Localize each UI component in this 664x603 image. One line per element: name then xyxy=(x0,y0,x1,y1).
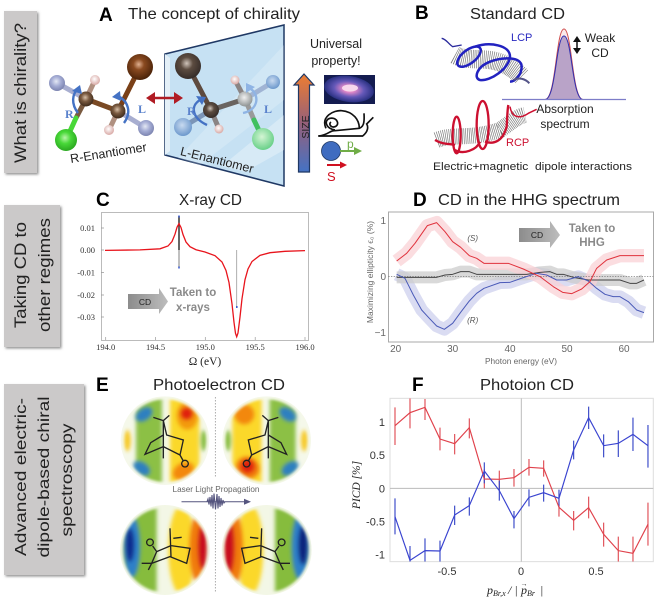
heading D: CD in the HHG spectrum xyxy=(438,192,620,209)
image: top-left VMI map with molecule xyxy=(121,395,209,488)
chart: X-ray CD spectrum: -0.03 xyxy=(77,312,95,322)
heading E: Photoelectron CD xyxy=(153,377,285,394)
heading F: Photoion CD xyxy=(480,377,574,394)
icon: particle with momentum and spin: p xyxy=(347,137,354,151)
heading C: X-ray CD xyxy=(179,192,242,209)
sidebar: taking CD to other regimes xyxy=(4,205,60,347)
chart: X-ray CD spectrum: 0.00 xyxy=(80,245,95,255)
heading D: D xyxy=(413,190,427,211)
heading C: C xyxy=(96,190,110,211)
LCP helix xyxy=(442,38,529,83)
panel D: CD in the HHG spectrum xyxy=(365,190,654,366)
chart: PICD vs momentum: / | xyxy=(507,583,518,597)
chart: PICD vs momentum: -0.5 xyxy=(366,516,385,528)
heading C xyxy=(96,190,242,211)
heading B xyxy=(415,3,565,24)
chart: ellipticity vs photon energy: −1 xyxy=(375,328,386,339)
arrow: CD taken to HHG: HHG xyxy=(579,237,605,249)
icon: particle with momentum and spin xyxy=(322,137,362,184)
chart: PICD vs momentum: → xyxy=(520,580,528,588)
text: universal property: property! xyxy=(311,54,361,68)
chart: ellipticity vs photon energy: 50 xyxy=(561,344,573,355)
sidebar: what is chirality xyxy=(4,11,37,173)
label: absorption spectrum: spectrum xyxy=(540,117,590,131)
icon: particle with momentum and spin: S xyxy=(327,169,336,184)
RCP helix xyxy=(435,101,537,153)
chart: ellipticity vs photon energy: 20 xyxy=(390,344,402,355)
chart: PICD vs momentum: 0 xyxy=(518,566,524,578)
chart: ellipticity vs photon energy: 60 xyxy=(618,344,630,355)
heading A xyxy=(99,5,300,26)
chart: PICD vs momentum: 1 xyxy=(379,417,385,429)
chart: ellipticity vs photon energy: (R) xyxy=(467,316,479,325)
chart: PICD vs momentum: 0 xyxy=(379,484,385,496)
sidebar: advanced spectroscopy xyxy=(4,384,84,575)
heading A: A xyxy=(99,5,113,26)
label: RCP: RCP xyxy=(506,137,529,149)
chart: PICD vs momentum: | xyxy=(540,583,543,597)
chart: PICD vs momentum: Br xyxy=(527,589,536,598)
chart: PICD vs momentum: 0.5 xyxy=(588,566,604,578)
heading E: E xyxy=(96,375,109,396)
panel F: photoion CD xyxy=(351,375,653,598)
heading E xyxy=(96,375,285,396)
chart: X-ray CD spectrum xyxy=(77,212,315,368)
label and arrow: laser light propagation: Laser Light Propagation xyxy=(173,485,260,494)
chart: PICD vs momentum: p xyxy=(486,583,493,597)
size arrow: SIZE xyxy=(300,115,312,139)
chart: X-ray CD spectrum: 194.0 xyxy=(96,342,115,352)
label: L-enantiomer: L-Enantiomer xyxy=(179,144,255,176)
label: R-enantiomer: R-Enantiomer xyxy=(69,140,148,166)
panel C: X-ray CD xyxy=(77,190,315,368)
heading B: B xyxy=(415,3,429,24)
chart: X-ray CD spectrum: 195.5 xyxy=(246,342,265,352)
chart: ellipticity vs photon energy xyxy=(365,212,654,366)
chart: X-ray CD spectrum: 195.0 xyxy=(196,342,215,352)
divider dots xyxy=(214,397,216,592)
image: top-right VMI map with molecule xyxy=(222,395,311,488)
chart: ellipticity vs photon energy: 40 xyxy=(504,344,516,355)
sidebar: advanced spectroscopy: spectroscopy xyxy=(59,424,76,536)
weak CD double arrow and label: CD xyxy=(591,46,609,60)
chart: ellipticity vs photon energy: (S) xyxy=(467,234,478,243)
chart: ellipticity vs photon energy: 0 xyxy=(380,272,386,283)
R-enantiomer molecule xyxy=(49,54,154,151)
panel A: the concept of chirality xyxy=(49,5,376,186)
text: universal property: Universal xyxy=(310,37,362,51)
sidebar: taking CD to other regimes: Taking CD to xyxy=(11,222,30,328)
absorption peak xyxy=(502,29,626,100)
arrow: CD taken to HHG: Taken to xyxy=(569,223,615,235)
chart: ellipticity vs photon energy: Maximizing ellipticity ϵ₀ (%) xyxy=(365,221,375,323)
heading D xyxy=(413,190,620,211)
sidebar: advanced spectroscopy: dipole-based chiral xyxy=(36,396,53,558)
chart: PICD vs momentum xyxy=(351,398,653,598)
arrow: CD taken to HHG: CD xyxy=(531,230,543,240)
R-enantiomer molecule: R xyxy=(65,107,74,121)
chart: X-ray CD spectrum: 0.01 xyxy=(80,223,95,233)
chart: PICD vs momentum: Br,x xyxy=(493,589,506,598)
chart: X-ray CD spectrum: -0.01 xyxy=(77,268,95,278)
heading B: Standard CD xyxy=(470,6,565,23)
chart: X-ray CD spectrum: 196.0 xyxy=(295,342,315,352)
R-enantiomer molecule: L xyxy=(138,102,146,116)
chart: X-ray CD spectrum: 194.5 xyxy=(146,342,165,352)
label and arrow: laser light propagation xyxy=(173,485,260,510)
panel E: photoelectron CD xyxy=(96,375,312,602)
size arrow xyxy=(294,74,314,172)
heading F: F xyxy=(412,375,424,396)
sidebar: advanced spectroscopy: Advanced electric- xyxy=(13,398,30,556)
L-enantiomer molecule xyxy=(174,53,280,150)
heading F xyxy=(412,375,574,396)
arrow: CD taken to x-rays: CD xyxy=(139,297,151,307)
arrow: CD taken to x-rays xyxy=(128,287,216,314)
weak CD double arrow and label xyxy=(573,31,616,60)
mirror xyxy=(165,25,284,186)
image: bottom-right VMI map with molecule xyxy=(222,502,312,602)
heading A: The concept of chirality xyxy=(128,6,300,23)
chart: PICD vs momentum: PICD [%] xyxy=(351,461,363,510)
arrow: CD taken to HHG xyxy=(519,221,615,249)
label: LCP: LCP xyxy=(511,32,532,44)
L-enantiomer molecule: R xyxy=(187,104,196,118)
chart: ellipticity vs photon energy: 30 xyxy=(447,344,459,355)
label: absorption spectrum: Absorption xyxy=(536,102,594,116)
sidebar: what is chirality: What is chirality? xyxy=(11,23,30,163)
L-enantiomer molecule: L xyxy=(264,102,272,116)
chart: PICD vs momentum: -1 xyxy=(375,550,385,562)
arrow: CD taken to x-rays: x-rays xyxy=(176,302,210,314)
caption: dipole interactions: Electric+magnetic dipole interactions xyxy=(433,161,633,173)
weak CD double arrow and label: Weak xyxy=(585,31,616,45)
arrow: CD taken to x-rays: Taken to xyxy=(170,287,216,299)
chart: ellipticity vs photon energy: 1 xyxy=(380,216,386,227)
panel B: standard CD xyxy=(415,3,633,173)
arrow: mirror double arrow xyxy=(146,92,183,104)
chart: X-ray CD spectrum: -0.02 xyxy=(77,290,95,300)
icon: galaxy xyxy=(322,73,376,105)
chart: PICD vs momentum: p xyxy=(520,583,527,597)
image: bottom-left VMI map with molecule xyxy=(120,502,210,602)
chart: PICD vs momentum: -0.5 xyxy=(438,566,456,578)
icon: snail xyxy=(318,111,373,136)
chart: ellipticity vs photon energy: Photon energy (eV) xyxy=(485,356,557,366)
chart: PICD vs momentum: 0.5 xyxy=(370,450,385,462)
chart: X-ray CD spectrum: Ω (eV) xyxy=(189,356,221,368)
sidebar: taking CD to other regimes: other regimes xyxy=(35,218,54,332)
